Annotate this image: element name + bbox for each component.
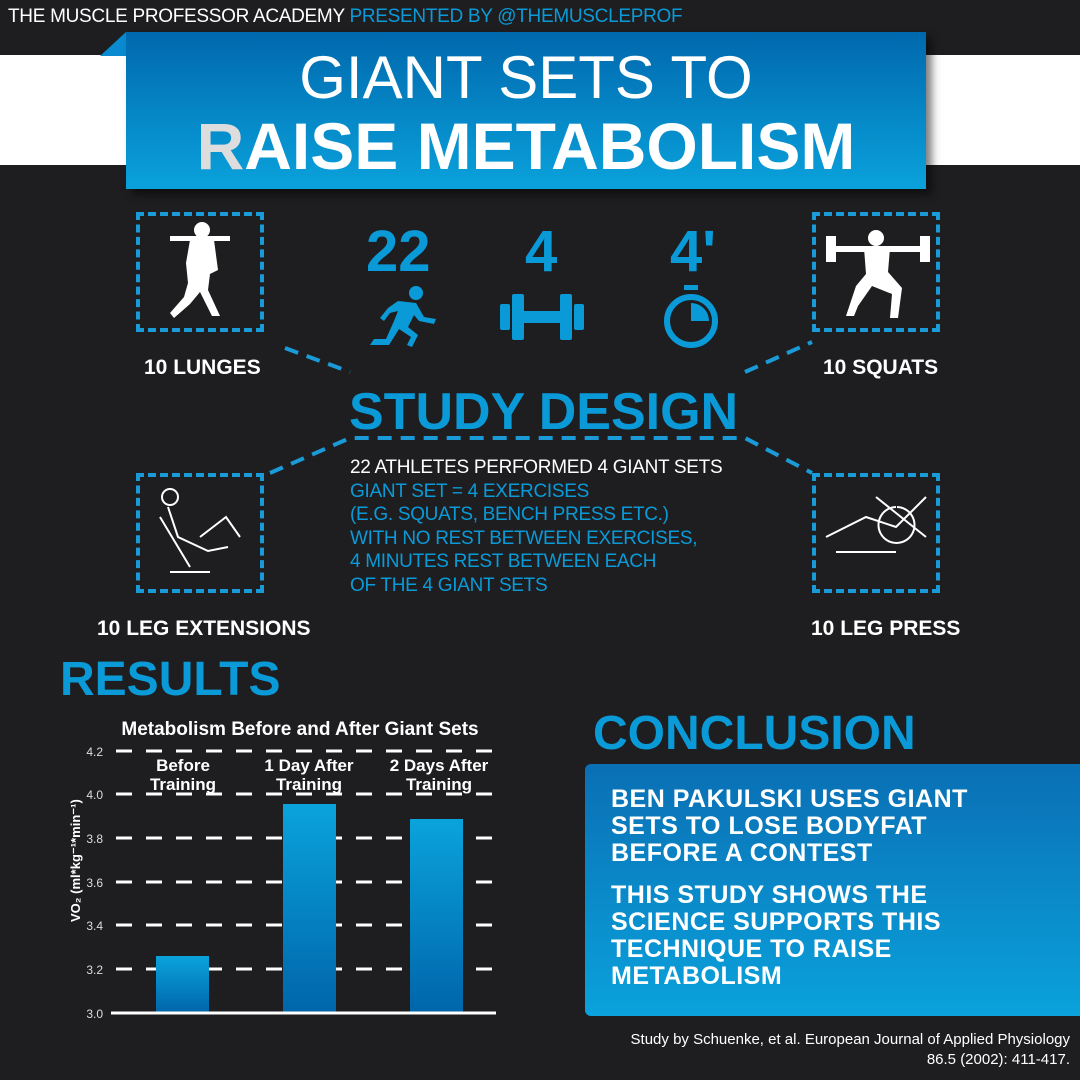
study design heading: STUDY DESIGN xyxy=(349,383,738,441)
conclusion panel: METABOLISM xyxy=(611,962,782,990)
conclusion panel: THIS STUDY SHOWS THE xyxy=(611,881,928,909)
study text: GIANT SET = 4 EXERCISES xyxy=(350,480,589,502)
conclusion panel: SCIENCE SUPPORTS THIS xyxy=(611,908,941,936)
text: 4 xyxy=(525,219,557,284)
conclusion panel: TECHNIQUE TO RAISE xyxy=(611,935,892,963)
bar chart: 3.2 xyxy=(86,963,103,977)
conclusion panel: BEFORE A CONTEST xyxy=(611,839,873,867)
study text: 4 MINUTES REST BETWEEN EACH xyxy=(350,551,656,572)
bar chart: Training xyxy=(276,775,342,794)
bar chart: Training xyxy=(150,775,216,794)
header strip: THE MUSCLE PROFESSOR ACADEMY PRESENTED BY @THEMUSCLEPROF xyxy=(8,6,682,27)
white band xyxy=(0,55,1080,165)
conclusion panel: BEN PAKULSKI USES GIANT xyxy=(611,785,968,813)
icon: dumbbell xyxy=(500,294,584,340)
label: 10 LEG PRESS xyxy=(811,617,960,640)
study text: (E.G. SQUATS, BENCH PRESS ETC.) xyxy=(350,504,669,525)
stats: 22 xyxy=(366,219,431,284)
title text: GIANT SETS TO xyxy=(299,44,753,111)
label: 10 LUNGES xyxy=(144,356,261,379)
study text xyxy=(350,457,722,596)
citation: Study by Schuenke, et al. European Journal of Applied Physiology xyxy=(631,1031,1070,1048)
bar chart: 4.2 xyxy=(86,745,103,759)
connector lines xyxy=(269,340,813,475)
bar chart: 3.8 xyxy=(86,832,103,846)
bar chart: Before xyxy=(156,756,210,775)
bar chart: VO₂ (ml*kg⁻¹*min⁻¹) xyxy=(68,799,83,922)
text: 4' xyxy=(670,219,716,284)
study text: OF THE 4 GIANT SETS xyxy=(350,574,547,596)
conclusion panel xyxy=(585,764,1080,1016)
citation xyxy=(631,1031,1070,1068)
title banner xyxy=(100,32,938,195)
bar chart: 3.0 xyxy=(86,1007,103,1021)
bar chart: 2 Days After xyxy=(390,756,489,775)
bar chart: Training xyxy=(406,775,472,794)
bar chart: 3.6 xyxy=(86,876,103,890)
conclusion heading: CONCLUSION xyxy=(593,707,916,760)
icon box: leg press xyxy=(812,473,940,593)
bar chart: 4.0 xyxy=(86,788,103,802)
bar chart xyxy=(68,719,496,1021)
icon box: lunges xyxy=(136,212,264,332)
icon: stopwatch xyxy=(664,285,718,348)
icon box: squats xyxy=(812,212,940,332)
bar chart: 3.4 xyxy=(86,919,103,933)
conclusion panel: SETS TO LOSE BODYFAT xyxy=(611,812,927,840)
title banner: RAISE METABOLISM xyxy=(197,109,855,183)
results heading: RESULTS xyxy=(60,653,280,706)
study text: 22 ATHLETES PERFORMED 4 GIANT SETS xyxy=(350,457,722,478)
bar chart: Metabolism Before and After Giant Sets xyxy=(121,719,479,740)
label: 10 LEG EXTENSIONS xyxy=(97,617,311,640)
study text: WITH NO REST BETWEEN EXERCISES, xyxy=(350,528,697,548)
icon: runner xyxy=(370,286,436,347)
bar chart: 1 Day After xyxy=(264,756,354,775)
citation: 86.5 (2002): 411-417. xyxy=(927,1051,1070,1068)
label: 10 SQUATS xyxy=(823,356,938,379)
icon box: leg extensions xyxy=(136,473,264,593)
